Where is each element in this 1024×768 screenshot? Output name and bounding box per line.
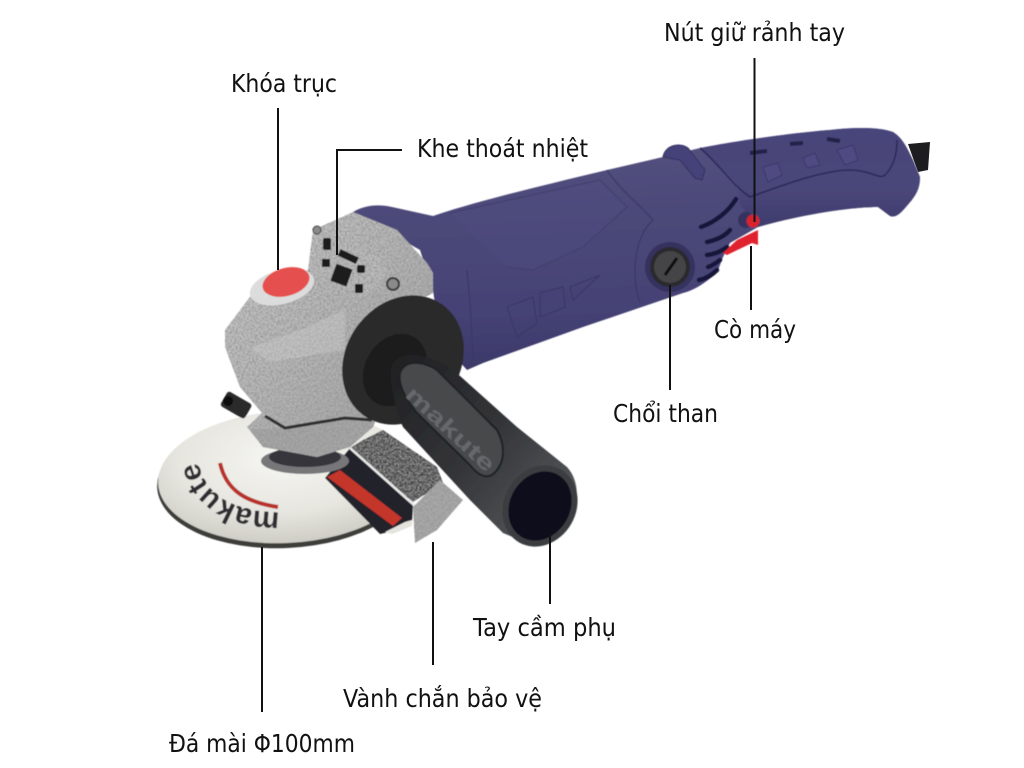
label: Cò máy: Cò máy <box>714 315 796 344</box>
label: Tay cầm phụ: Tay cầm phụ <box>472 613 616 642</box>
wheel guard <box>350 430 463 543</box>
label: Khóa trục: Khóa trục <box>231 69 337 98</box>
label: Đá mài Φ100mm: Đá mài Φ100mm <box>169 729 355 758</box>
trigger <box>723 230 758 255</box>
leader: Nút giữ rảnh tay <box>754 58 756 222</box>
leader: Cò máy <box>750 246 752 310</box>
heat vent plate <box>313 226 399 298</box>
leader: Tay cầm phụ <box>549 532 551 604</box>
power cord <box>908 142 930 172</box>
label: Chổi than: Chổi than <box>613 399 718 428</box>
housing grooves <box>450 170 653 360</box>
grinding disc: makute <box>184 464 278 529</box>
leader: Khóa trục <box>277 108 279 270</box>
leader: Chổi than <box>669 285 671 390</box>
auxiliary handle <box>317 272 592 560</box>
grinding disc <box>156 413 414 550</box>
label: Khe thoát nhiệt: Khe thoát nhiệt <box>417 134 588 163</box>
label: Vành chắn bảo vệ: Vành chắn bảo vệ <box>343 684 542 713</box>
lock button on handle <box>663 145 705 180</box>
vent slots on housing <box>699 199 736 280</box>
spindle lock button <box>246 262 318 312</box>
side bolt <box>220 391 252 419</box>
rear handle overlay <box>700 128 920 227</box>
hand-free lock button <box>738 212 760 228</box>
angle grinder illustration <box>156 127 921 550</box>
auxiliary handle: makute <box>401 381 500 477</box>
label: Nút giữ rảnh tay: Nút giữ rảnh tay <box>664 18 845 47</box>
carbon brush cap <box>645 242 695 292</box>
gear head <box>225 212 433 457</box>
leader: Đá mài <box>261 547 263 712</box>
motor housing <box>353 128 920 370</box>
leader: Vành chắn bảo vệ <box>432 542 434 665</box>
leader: Khe thoát nhiệt <box>337 150 402 255</box>
